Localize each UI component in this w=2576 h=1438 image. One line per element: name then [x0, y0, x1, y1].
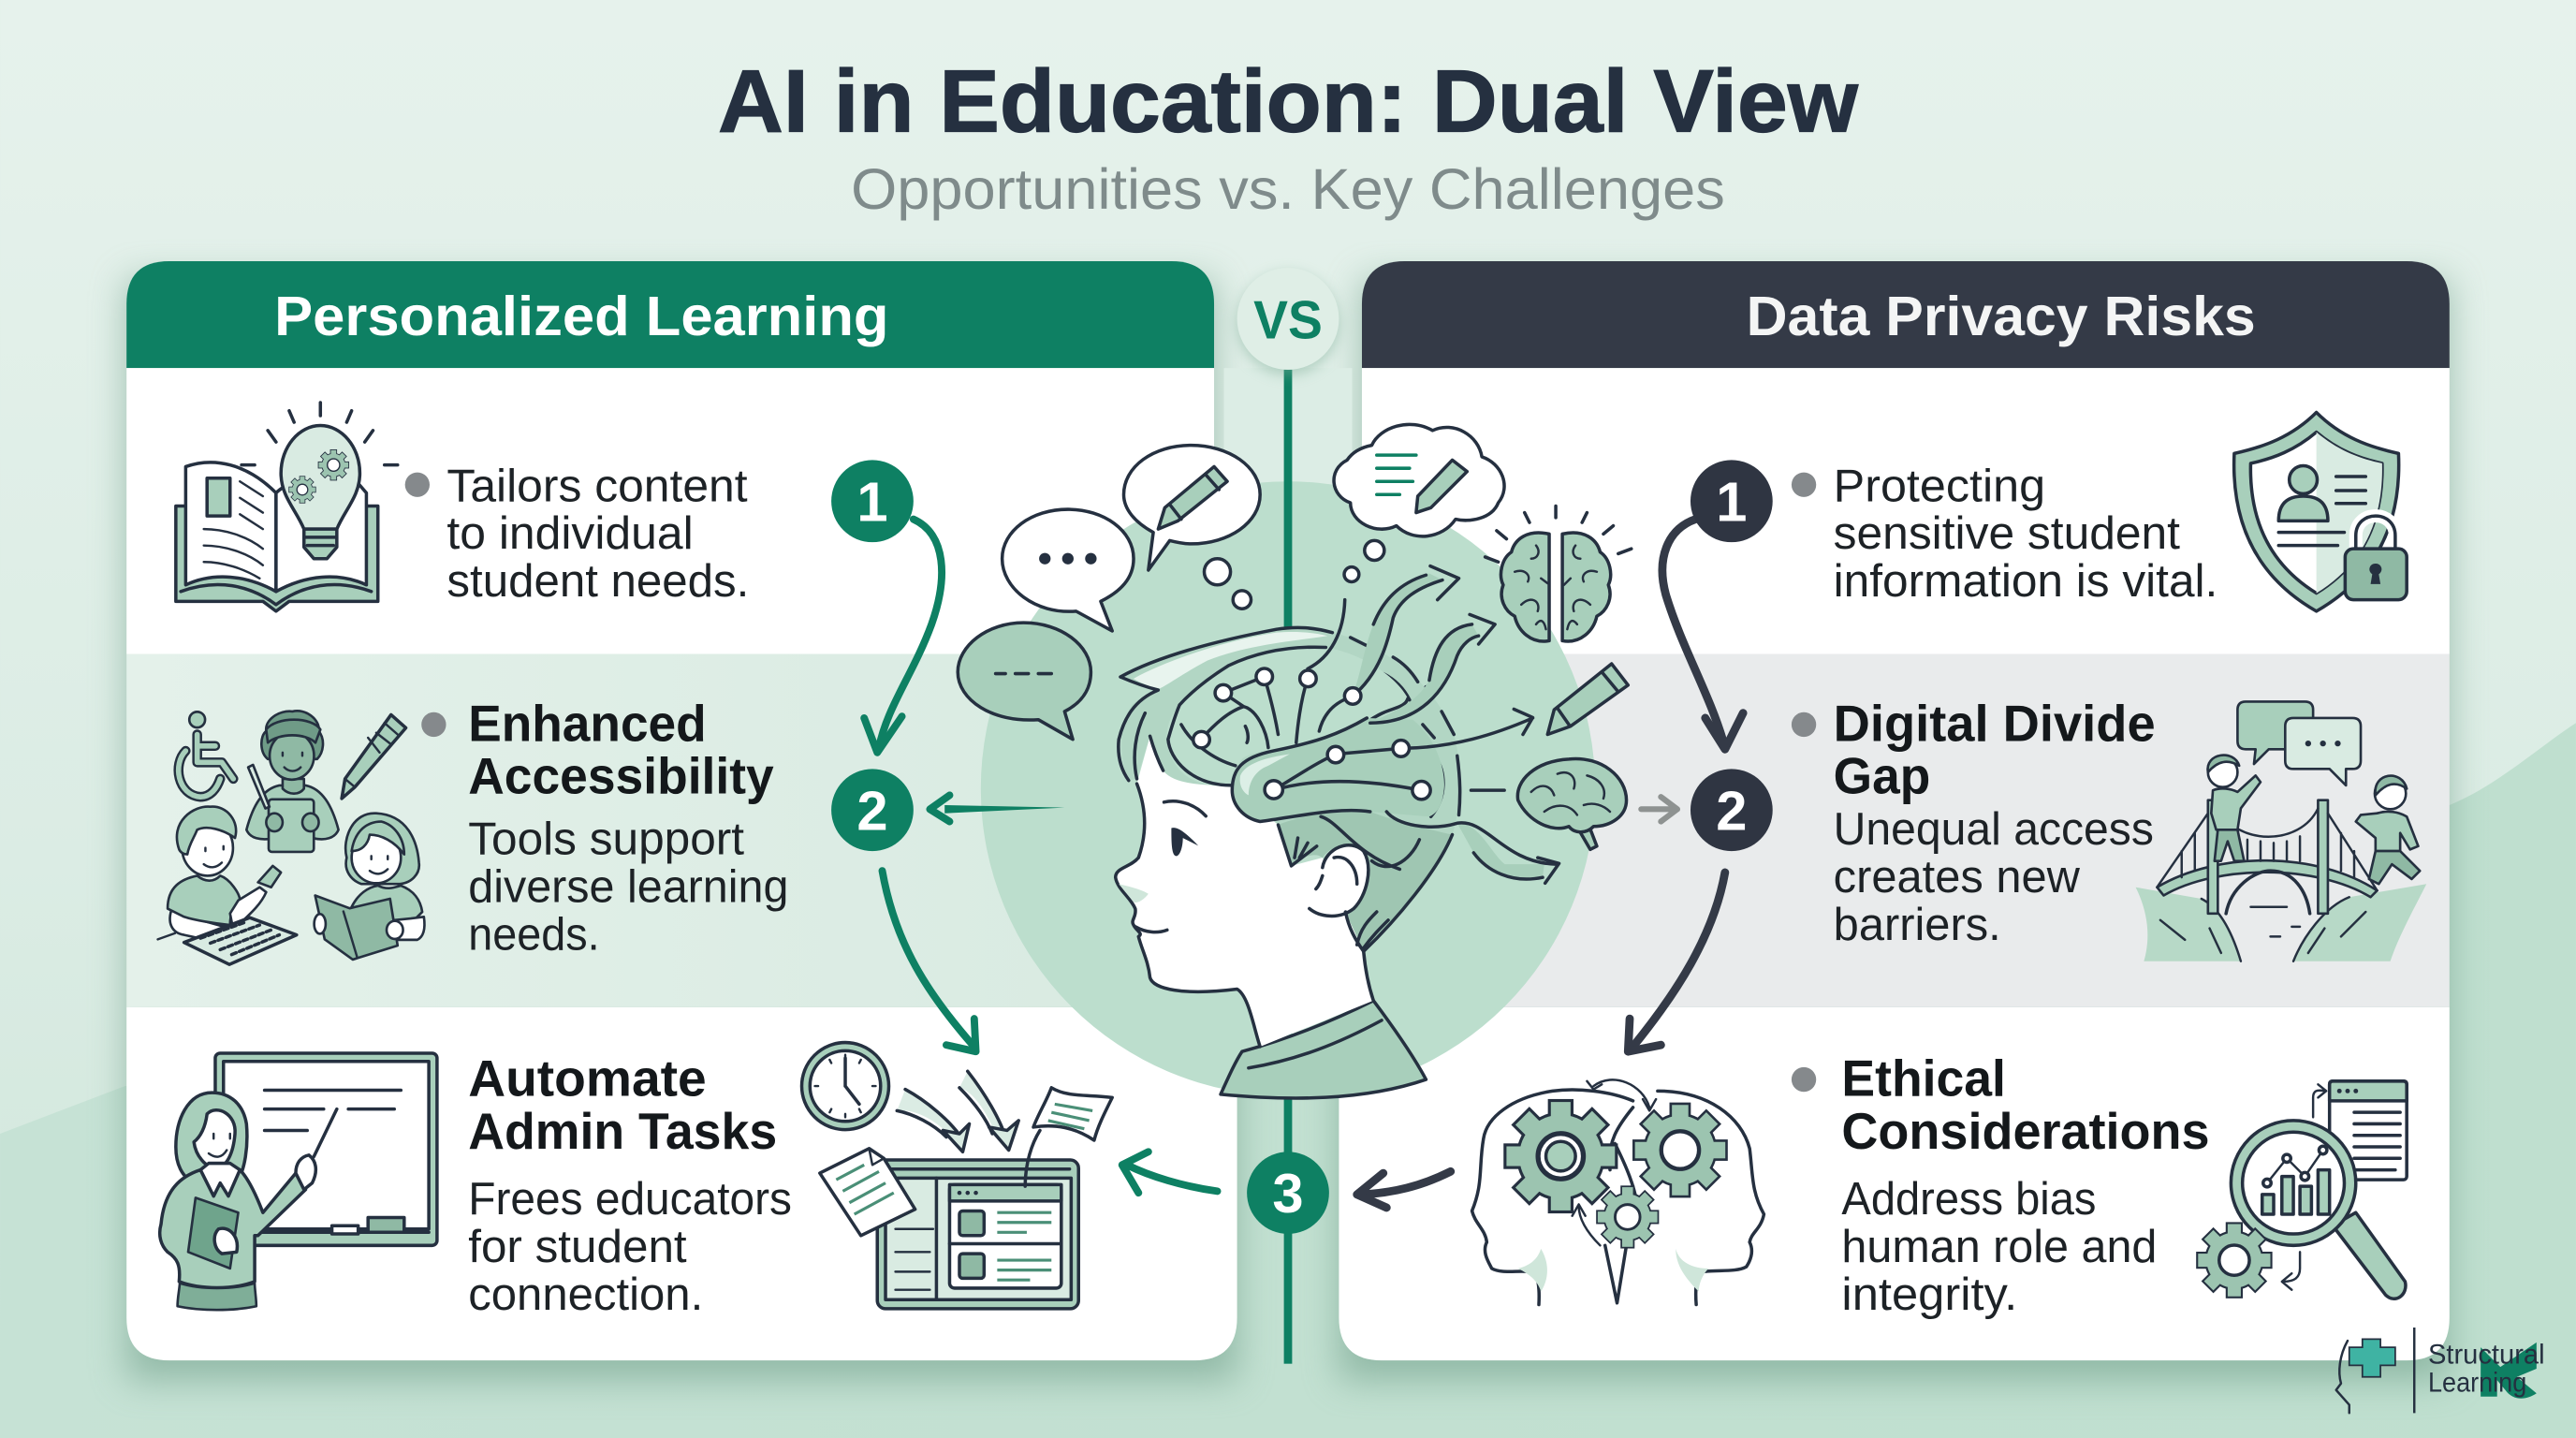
text: digital divide gap: Gap: [1834, 748, 1930, 805]
text: digital divide gap: Unequal access: [1834, 804, 2154, 855]
thought dot small right: [1344, 567, 1359, 581]
paper right: [1033, 1088, 1112, 1140]
logo text: Learning: [2428, 1368, 2526, 1399]
left panel header bar: [126, 261, 1214, 368]
girl with book: [315, 814, 424, 960]
text: protecting information: [1834, 461, 2217, 607]
text: protecting information: sensitive student: [1834, 508, 2180, 559]
whiteboard: [215, 1053, 437, 1245]
icon: open book with lightbulb: [176, 403, 398, 611]
return arrow: [2282, 1252, 2300, 1290]
arrow ribbon to side: [1370, 624, 1479, 723]
number badge 1 right: [1690, 460, 1773, 542]
text: ethical considerations: Considerations: [1841, 1103, 2210, 1160]
text: ethical considerations: Ethical: [1841, 1050, 2006, 1108]
logo text: Structural: [2428, 1340, 2545, 1371]
neural arrows: [1308, 566, 1559, 883]
back hair shading: [1278, 811, 1453, 951]
text: enhanced accessibility: Enhanced: [468, 696, 707, 753]
heading: personalized learning: Personalized Learning: [274, 285, 889, 347]
arrow: grey to step 2: [1641, 797, 1677, 822]
left row 2 background: [126, 654, 1214, 1007]
text: digital divide gap: Digital Divide: [1834, 696, 2156, 753]
arrow: step 2 to admin: [883, 871, 976, 1051]
arrow ribbon to lower right: [1457, 823, 1544, 880]
number badge 1 left: [831, 460, 914, 542]
thought dots left: [1204, 559, 1231, 585]
text: protecting information: information is vital.: [1834, 556, 2217, 607]
number badge 2 right: [1690, 769, 1773, 851]
pencil icon: [1547, 664, 1628, 734]
lens: [2231, 1121, 2356, 1245]
subtitle: Opportunities vs. Key Challenges: [851, 157, 1725, 222]
icon: shield with lock: [2234, 413, 2407, 611]
right row 1 background: [1362, 368, 2450, 654]
clock: [802, 1043, 889, 1130]
thought dot right: [1365, 540, 1384, 560]
step arrows right: [1357, 520, 1743, 1208]
text: digital divide gap: [1834, 696, 2156, 950]
logo k mark: [2481, 1343, 2537, 1399]
panel: personalized learning: [126, 261, 1237, 1360]
arrow: right step 2 to ethics: [1628, 873, 1725, 1051]
boy with tablet: [246, 711, 339, 852]
arrow: step 3 to dashboard: [1122, 1152, 1218, 1193]
centre divider line: [1284, 370, 1292, 1364]
document: [2313, 1081, 2407, 1180]
hair mass: [1120, 628, 1460, 951]
vs badge: [1237, 268, 1339, 374]
text: digital divide gap: creates new: [1834, 852, 2080, 902]
step arrows left: [864, 520, 1218, 1193]
arrow ribbon to top brain: [1352, 574, 1442, 697]
title: AI in Education: Dual View: [718, 51, 1858, 151]
text: digital divide gap: barriers.: [1834, 900, 2001, 950]
logo: structural learning: [2336, 1328, 2545, 1413]
speech bubble: dashes: [958, 623, 1090, 740]
number badge 2 left: [831, 769, 914, 851]
left row 3 background: [126, 1007, 1237, 1360]
speech bubble: dots: [1003, 509, 1134, 631]
text: automate admin tasks: Frees educators: [468, 1174, 792, 1225]
bullet: [1792, 712, 1816, 737]
arrow: step 3 to heads: [1357, 1171, 1451, 1208]
text: ethical considerations: [1841, 1050, 2210, 1320]
panel: data privacy risks: [1339, 261, 2450, 1360]
hair highlight: [1134, 632, 1327, 688]
number badge 2 left: 2: [856, 779, 888, 842]
speech bubble: pencil: [1123, 446, 1260, 570]
text: tailors content: Tailors content: [446, 461, 748, 511]
thought dot small left: [1233, 591, 1251, 609]
centre gutter: [1224, 368, 1352, 1007]
text: enhanced accessibility: diverse learning: [468, 862, 788, 913]
face and neck: [1116, 736, 1373, 1047]
icon: clock, papers and dashboard: [802, 1043, 1112, 1309]
left profile: [1472, 1090, 1633, 1304]
illustration: student head with ideas: [958, 424, 1632, 1098]
arrows into dashboard: [897, 1071, 1040, 1186]
text: automate admin tasks: [468, 1050, 792, 1320]
text: automate admin tasks: Admin Tasks: [468, 1103, 777, 1160]
number badge 1 right: 1: [1716, 470, 1747, 533]
bullet: [421, 712, 446, 737]
logo plus: [2349, 1339, 2395, 1377]
bridge deck and towers: [2157, 800, 2378, 936]
teacher figure: [160, 1093, 337, 1310]
right row 3 background: [1339, 1007, 2450, 1360]
centre neck and crossing: [1605, 1108, 1638, 1303]
text: ethical considerations: human role and: [1841, 1222, 2157, 1272]
bullet: [405, 473, 430, 497]
text: enhanced accessibility: Tools support: [468, 814, 744, 865]
paper left: [820, 1149, 915, 1236]
bullet: [1792, 1067, 1816, 1092]
logo head outline: [2336, 1341, 2349, 1413]
handle: [2333, 1212, 2406, 1299]
text: tailors content: student needs.: [446, 556, 749, 607]
text: automate admin tasks: connection.: [468, 1269, 703, 1320]
arrow: right step 1 to 2: [1662, 520, 1743, 749]
hair outlines: [1119, 627, 1453, 951]
number badge 2 right: 2: [1716, 779, 1747, 842]
bullet: [1792, 473, 1816, 497]
text: enhanced accessibility: [468, 696, 788, 960]
text: protecting information: Protecting: [1834, 461, 2045, 511]
text: ethical considerations: Address bias: [1841, 1174, 2096, 1225]
brain upper lobe: [1167, 647, 1409, 786]
right panel header bar: [1362, 261, 2450, 368]
thought cloud: [1334, 424, 1504, 536]
pencil: [342, 714, 406, 799]
icon: two heads with gears: [1472, 1079, 1764, 1304]
text: ethical considerations: integrity.: [1841, 1269, 2017, 1320]
centre circle backdrop: [981, 481, 1595, 1096]
exchange arrows: [1573, 1079, 1656, 1245]
wheelchair symbol: [179, 712, 233, 797]
text: enhanced accessibility: Accessibility: [468, 748, 774, 805]
panel shadows: [126, 279, 2450, 1380]
shirt: [1221, 1001, 1426, 1098]
icon: magnifier with chart: [2198, 1081, 2407, 1299]
gears: [1506, 1102, 1615, 1211]
logo divider: [2413, 1328, 2415, 1413]
text: enhanced accessibility: needs.: [468, 909, 600, 960]
icon: students and accessibility: [158, 711, 424, 964]
face details: [1119, 801, 1206, 932]
logo text: [2428, 1340, 2545, 1399]
neural nodes: [1193, 668, 1430, 800]
child at keyboard: [158, 807, 297, 964]
arrow: step 1 to 2: [864, 520, 942, 753]
number badge 3: 3: [1272, 1162, 1304, 1225]
scalp arcs: [1345, 638, 1460, 816]
left row 1 background: [126, 368, 1214, 654]
arrow strokes: [1308, 566, 1559, 883]
icon: teacher at whiteboard: [160, 1053, 437, 1310]
vs badge: VS: [1253, 291, 1323, 351]
cliffs: [2136, 884, 2426, 961]
text: tailors content: [446, 461, 749, 607]
right row 2 background: [1362, 654, 2450, 1007]
child right on bridge: [2356, 776, 2420, 884]
chat bubbles: [2237, 701, 2361, 785]
number badge 1 left: 1: [856, 470, 888, 533]
brain lower tube: [1232, 718, 1444, 869]
chart: [2262, 1146, 2330, 1214]
brain side icon: [1517, 758, 1627, 849]
heading: data privacy risks: Data Privacy Risks: [1747, 285, 2256, 347]
child left on bridge: [2208, 756, 2261, 861]
number badge 3: [1247, 1152, 1329, 1234]
icon: bridge over digital divide: [2136, 701, 2426, 961]
right profile: [1658, 1091, 1764, 1304]
lens glass: [2243, 1132, 2344, 1234]
text: automate admin tasks: for student: [468, 1222, 687, 1272]
gear: [2198, 1224, 2271, 1297]
brain top icon: [1486, 506, 1632, 641]
text: tailors content: to individual: [446, 508, 694, 559]
arrow: centre to step 2: [929, 795, 1064, 822]
neck shading: [1518, 1249, 1547, 1291]
shirt collar: [1249, 1020, 1382, 1068]
text: automate admin tasks: Automate: [468, 1050, 707, 1108]
dashboard window: [877, 1160, 1078, 1309]
ear: [1278, 825, 1388, 951]
face outline: [1116, 784, 1373, 1047]
